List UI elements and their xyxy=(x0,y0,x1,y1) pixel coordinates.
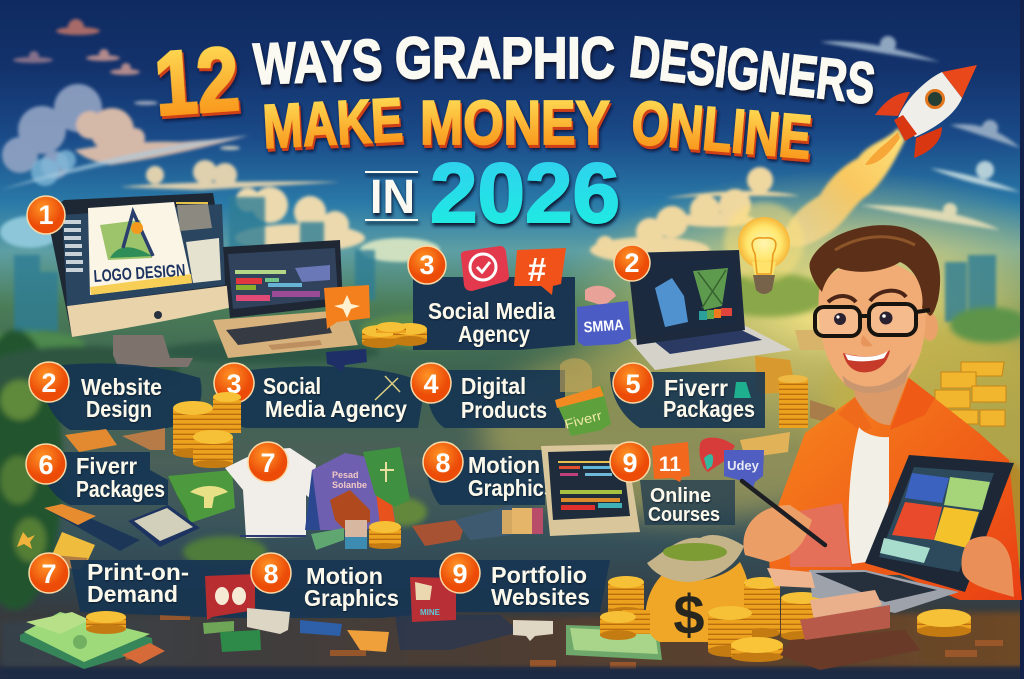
torso and shirt xyxy=(768,378,1022,600)
label: Agency xyxy=(458,321,530,347)
icon: hashtag bubble: # xyxy=(528,251,546,288)
SMMA label: SMMA xyxy=(583,317,624,336)
item: print on demand: Demand xyxy=(87,581,178,607)
icon: fiverr tag: Fiverr xyxy=(563,407,604,432)
pink paper xyxy=(789,503,851,567)
icon: gold bars and mid stacks xyxy=(740,330,1006,458)
skyline xyxy=(14,197,996,335)
item: social media agency: Media Agency xyxy=(265,396,407,422)
item: fiverr packages right: Fiverr xyxy=(664,375,728,401)
item: digital products: 4 xyxy=(423,369,439,399)
item: portfolio websites: Portfolio xyxy=(491,562,587,588)
title number 12: 12 xyxy=(151,29,242,135)
item: shirts and merch: Solanbe xyxy=(332,480,367,490)
mid clouds right xyxy=(590,167,800,263)
icon: fiverr tag xyxy=(555,386,611,436)
item: motion graphics mid xyxy=(423,442,555,505)
item: portfolio websites xyxy=(440,553,590,641)
item: motion graphics bottom xyxy=(251,553,456,622)
title xyxy=(151,24,878,240)
item: website design: Website xyxy=(81,374,162,400)
item: fiverr packages right xyxy=(555,363,765,436)
foliage and ground xyxy=(0,273,1024,610)
item: print on demand xyxy=(29,553,189,607)
item: social media agency xyxy=(214,349,425,428)
glasses xyxy=(815,304,930,336)
title line 1: GRAPHIC xyxy=(395,26,615,91)
item: online courses: Udey xyxy=(727,458,760,473)
icon: star bubble xyxy=(324,285,370,329)
item: fiverr packages right: Packages xyxy=(663,396,755,422)
row 4 band xyxy=(70,560,610,618)
neck xyxy=(851,365,912,425)
undershirt xyxy=(849,427,889,564)
item: motion graphics bottom: Motion xyxy=(306,563,383,589)
item: motion graphics bottom: Graphics xyxy=(304,585,399,611)
item: website design: 2 xyxy=(41,368,57,398)
icon: green box xyxy=(168,470,235,523)
badge 2 xyxy=(614,245,650,281)
badge 3: 3 xyxy=(419,250,435,280)
item: online courses: Online xyxy=(650,485,711,507)
title line 1: WAYS xyxy=(252,28,383,97)
icon: light bulb xyxy=(724,202,804,294)
right hand xyxy=(962,536,1014,597)
badge 1: 1 xyxy=(38,200,54,230)
icon: motion monitor xyxy=(541,444,640,536)
item: website design: Design xyxy=(86,396,152,422)
item: shirts and merch: Pesad xyxy=(332,470,359,480)
item: online courses: 11 xyxy=(659,453,681,476)
item: social media agency: 3 xyxy=(226,369,242,399)
title line 1 xyxy=(252,24,878,117)
designer character xyxy=(742,225,1022,640)
item: shirts and merch xyxy=(225,442,512,550)
small pink clouds xyxy=(56,19,100,35)
title line 2: MONEY xyxy=(420,89,610,158)
left hand xyxy=(743,505,812,562)
badge 1 xyxy=(27,196,65,234)
item: online courses xyxy=(610,438,764,526)
icon: money pile xyxy=(20,611,165,669)
panel: logo design monitor xyxy=(27,193,233,367)
item: digital products xyxy=(411,358,592,428)
title line 1: DESIGNERS xyxy=(627,24,878,117)
item: portfolio websites: Websites xyxy=(491,584,590,610)
big left cloud xyxy=(2,84,102,179)
icon: money bag and coins xyxy=(566,535,971,670)
book xyxy=(767,568,815,588)
item: social media agency: Social xyxy=(263,373,321,399)
item: website design xyxy=(29,362,202,430)
item: motion graphics mid: 8 xyxy=(435,448,451,478)
icon: rocket with flame xyxy=(782,65,977,247)
icon: money bag and coins: $ xyxy=(673,583,705,646)
face xyxy=(818,261,926,392)
stylus xyxy=(742,481,825,545)
panel: laptop left xyxy=(213,240,370,358)
icon: boxes and papers xyxy=(17,504,140,570)
item: motion graphics bottom: 8 xyxy=(263,559,279,589)
item: fiverr packages right: 5 xyxy=(625,369,641,399)
icon: motion tiles xyxy=(203,574,520,652)
item: motion graphics bottom: MINE xyxy=(420,608,441,617)
eyes xyxy=(834,313,846,325)
item: shirts and merch: 7 xyxy=(260,448,276,478)
item: digital products: Digital xyxy=(461,373,526,399)
item: fiverr packages left: Fiverr xyxy=(76,453,137,479)
tablet xyxy=(865,455,1014,592)
icon: ground items left xyxy=(65,392,241,468)
item: print on demand: Print-on- xyxy=(87,559,189,585)
item: fiverr packages left: 6 xyxy=(38,450,54,480)
hair xyxy=(810,225,940,316)
icon: tablet xyxy=(128,505,200,547)
item: digital products: Products xyxy=(461,397,547,423)
title line 3: 2026 xyxy=(430,146,620,240)
item: motion graphics mid: Motion xyxy=(468,452,540,478)
icon: social app xyxy=(461,246,509,291)
title line 2 xyxy=(261,86,814,173)
icon: palette blocks xyxy=(502,508,543,534)
title line 3: IN xyxy=(370,171,415,224)
icon: coins by laptop xyxy=(362,322,427,348)
item: online courses: 9 xyxy=(622,448,638,478)
laptop under tablet xyxy=(809,570,959,613)
title line 2: MAKE xyxy=(261,86,405,162)
title line 2: ONLINE xyxy=(629,88,814,173)
smile xyxy=(843,350,890,372)
item: print on demand: 7 xyxy=(41,559,57,589)
item: fiverr packages left: Packages xyxy=(76,476,165,502)
item: portfolio websites: 9 xyxy=(452,559,468,589)
badge 3 xyxy=(408,246,446,284)
label xyxy=(428,298,555,347)
item: online courses: Courses xyxy=(648,504,720,526)
mid clouds left xyxy=(120,160,340,190)
label: Social Media xyxy=(428,298,555,324)
icon: hashtag bubble xyxy=(514,248,566,295)
item: motion graphics mid: Graphics xyxy=(468,475,555,501)
logo design label: LOGO DESIGN xyxy=(93,261,186,286)
panel: SMMA laptop xyxy=(577,245,792,370)
item: fiverr packages left xyxy=(26,444,168,505)
badge 2: 2 xyxy=(624,248,640,278)
eyebrows xyxy=(828,296,856,302)
panel: social media agency top xyxy=(408,246,575,350)
ear xyxy=(922,313,938,341)
